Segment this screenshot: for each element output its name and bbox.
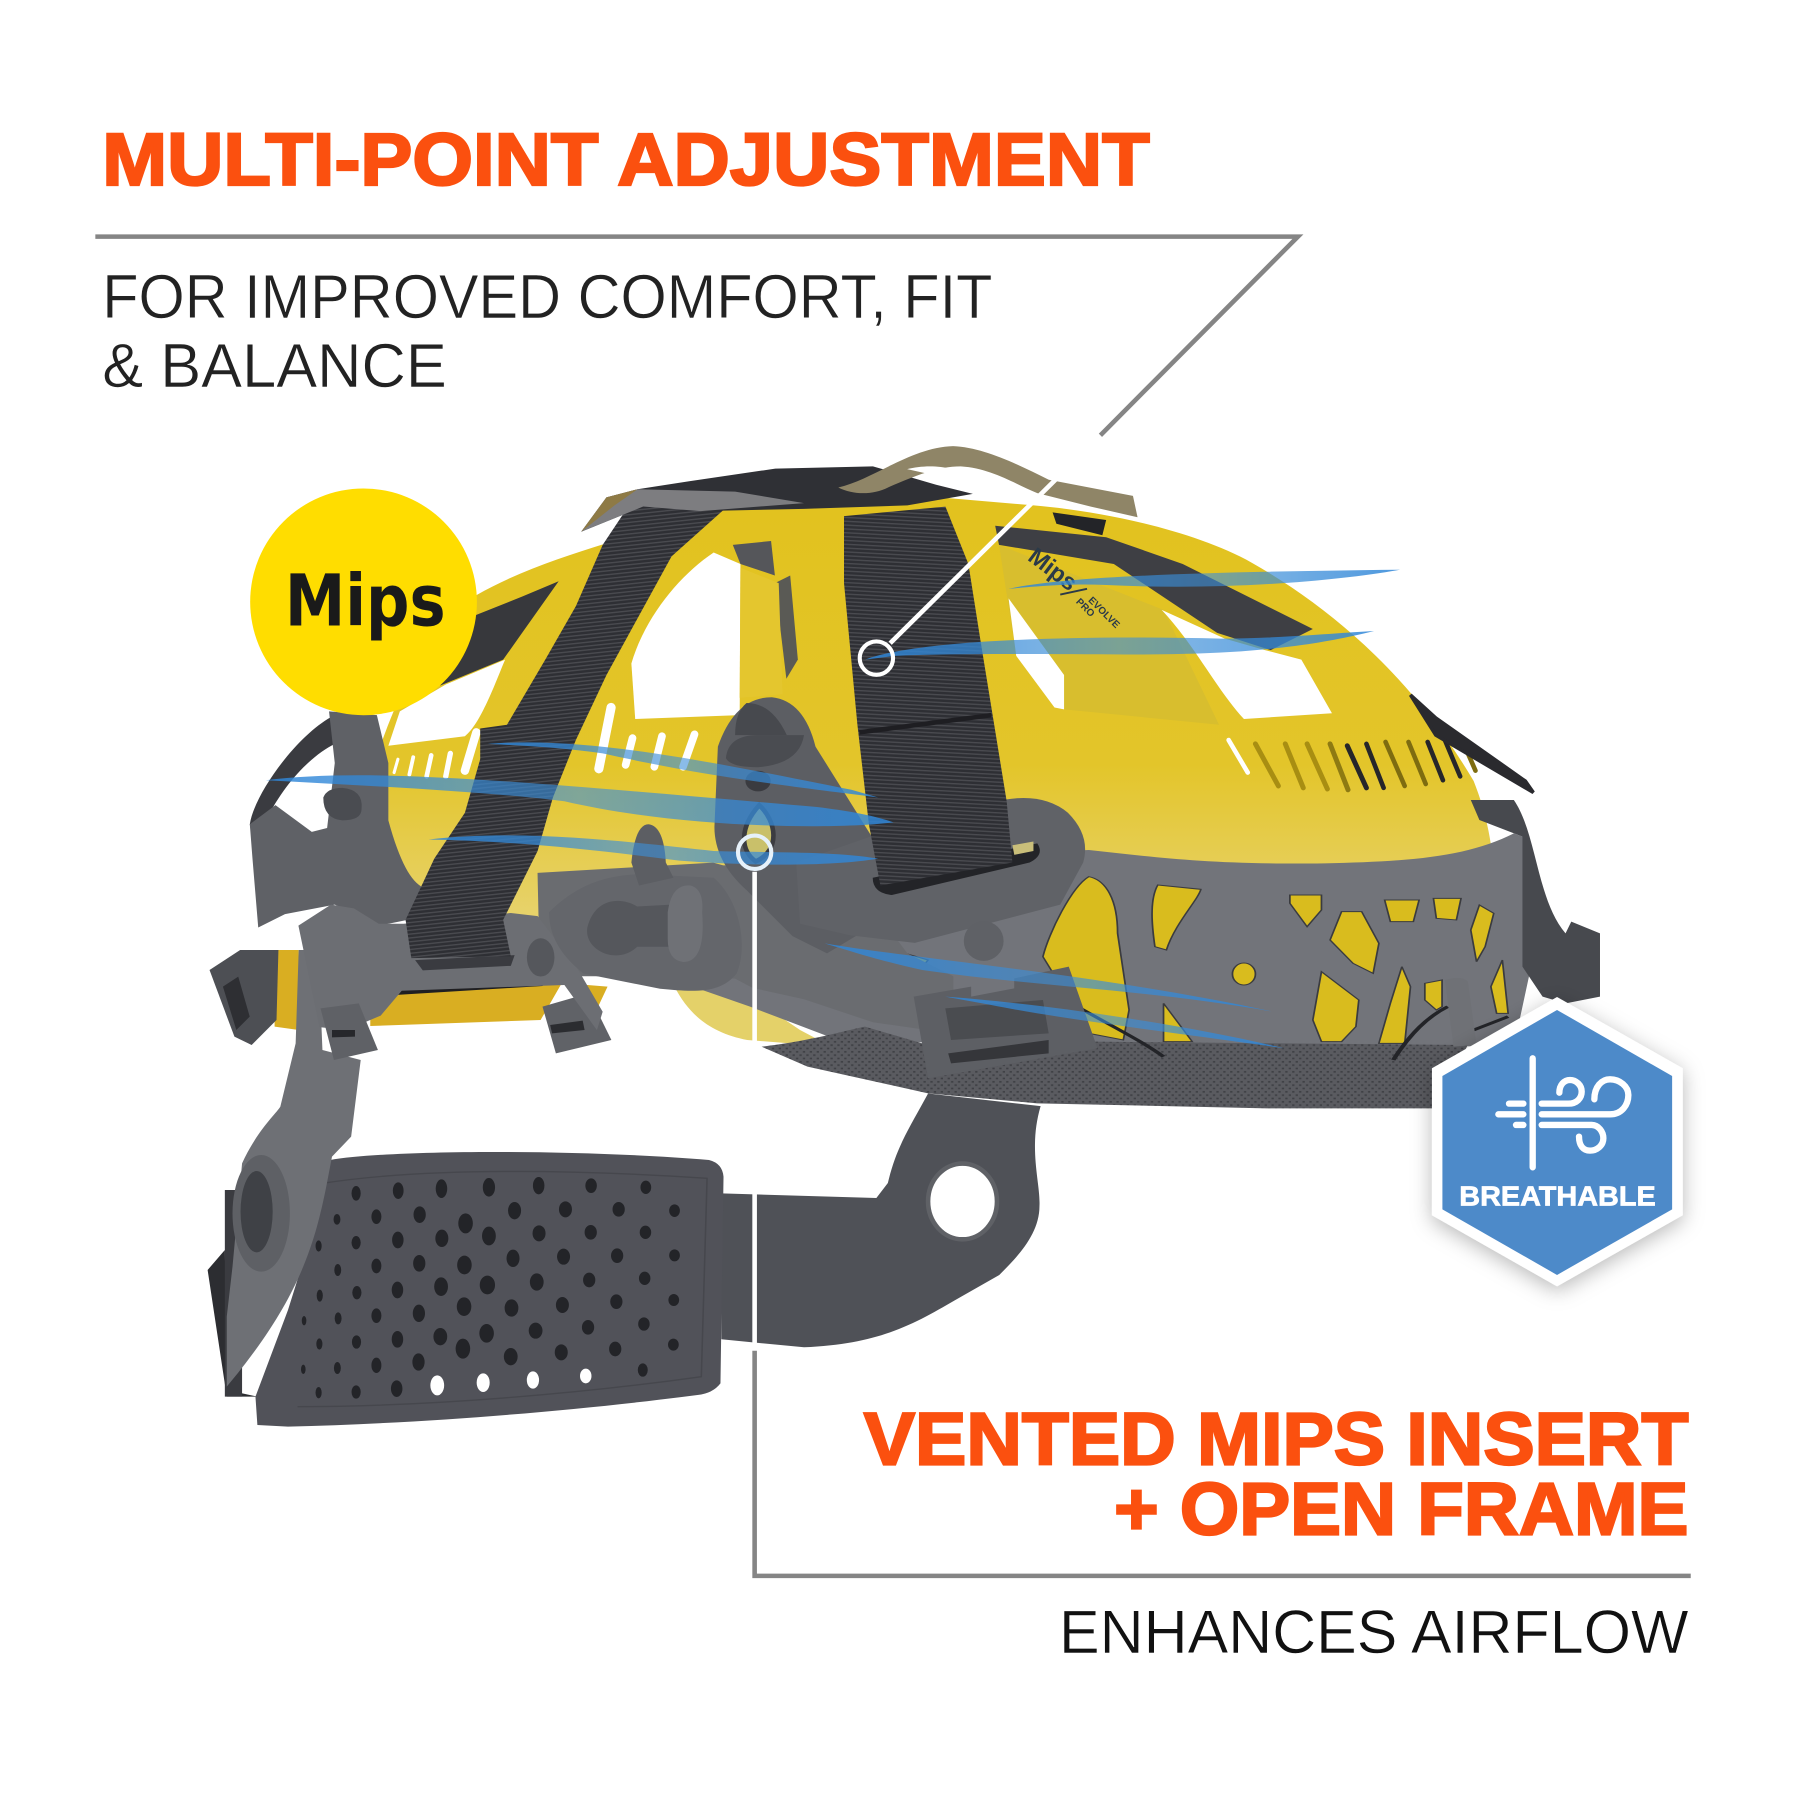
inner headband pad <box>995 526 1313 650</box>
long rear arm and knob <box>208 950 724 1427</box>
shell windows and inner insert, left <box>388 541 798 776</box>
lattice post <box>1445 978 1477 1047</box>
heading: open frame: + OPEN FRAME <box>1114 1467 1688 1551</box>
rear arm with hole <box>721 1093 1041 1347</box>
back dark padding <box>440 581 559 686</box>
sweatband fabric <box>762 1027 1468 1108</box>
grey lattice band <box>693 800 1600 1108</box>
centre clip on rear arm <box>321 1003 378 1060</box>
callout line: vented insert leader <box>738 836 1691 1576</box>
top crown strap and tan ribbon <box>581 446 1138 532</box>
central lower band <box>538 863 953 1034</box>
lower yellow shell, pale crescent and rear strip <box>275 950 831 1047</box>
subheading: comfort and fit: FOR IMPROVED COMFORT, FIT <box>102 263 992 332</box>
yellow shell <box>380 492 1493 988</box>
subheading: balance: & BALANCE <box>102 332 447 401</box>
vertical adjuster plate <box>714 697 884 953</box>
airflow streaks <box>266 570 1400 1048</box>
icon: wind through barrier <box>1498 1058 1628 1167</box>
Mips badge: Mips <box>285 559 446 642</box>
Mips badge <box>250 488 477 715</box>
heading: multi-point adjustment: MULTI-POINT ADJUSTMENT <box>102 117 1150 201</box>
insert logo text: Mips <box>1023 543 1082 597</box>
callout line: multi-point adjustment leader <box>95 237 1298 675</box>
shell windows and inner insert, right <box>995 512 1475 790</box>
breathable hexagon badge: BREATHABLE <box>1459 1181 1656 1212</box>
elastic cords <box>1072 1003 1508 1060</box>
shell windows and inner insert, right: PRO <box>1073 597 1097 620</box>
right rear strap <box>1410 695 1533 793</box>
perforated neck pad <box>255 1152 724 1427</box>
strap mount plate <box>796 798 1085 961</box>
lower arm bracket <box>298 905 603 1030</box>
subheading: enhances airflow: ENHANCES AIRFLOW <box>1059 1598 1689 1666</box>
helmet suspension product illustration <box>208 446 1600 1427</box>
heading: vented mips insert: VENTED MIPS INSERT <box>864 1396 1688 1480</box>
left side plate and strap loop <box>250 711 423 928</box>
sliding adjuster plate <box>549 824 742 991</box>
right end bracket <box>1471 800 1600 1003</box>
breathable hexagon badge <box>1432 997 1683 1286</box>
front vent slots <box>1229 740 1475 790</box>
shell windows and inner insert, right: EVOLVE <box>1086 595 1122 631</box>
rear clips <box>210 950 611 1053</box>
front buckle clip <box>914 967 1097 1078</box>
webbing straps <box>406 493 1012 958</box>
